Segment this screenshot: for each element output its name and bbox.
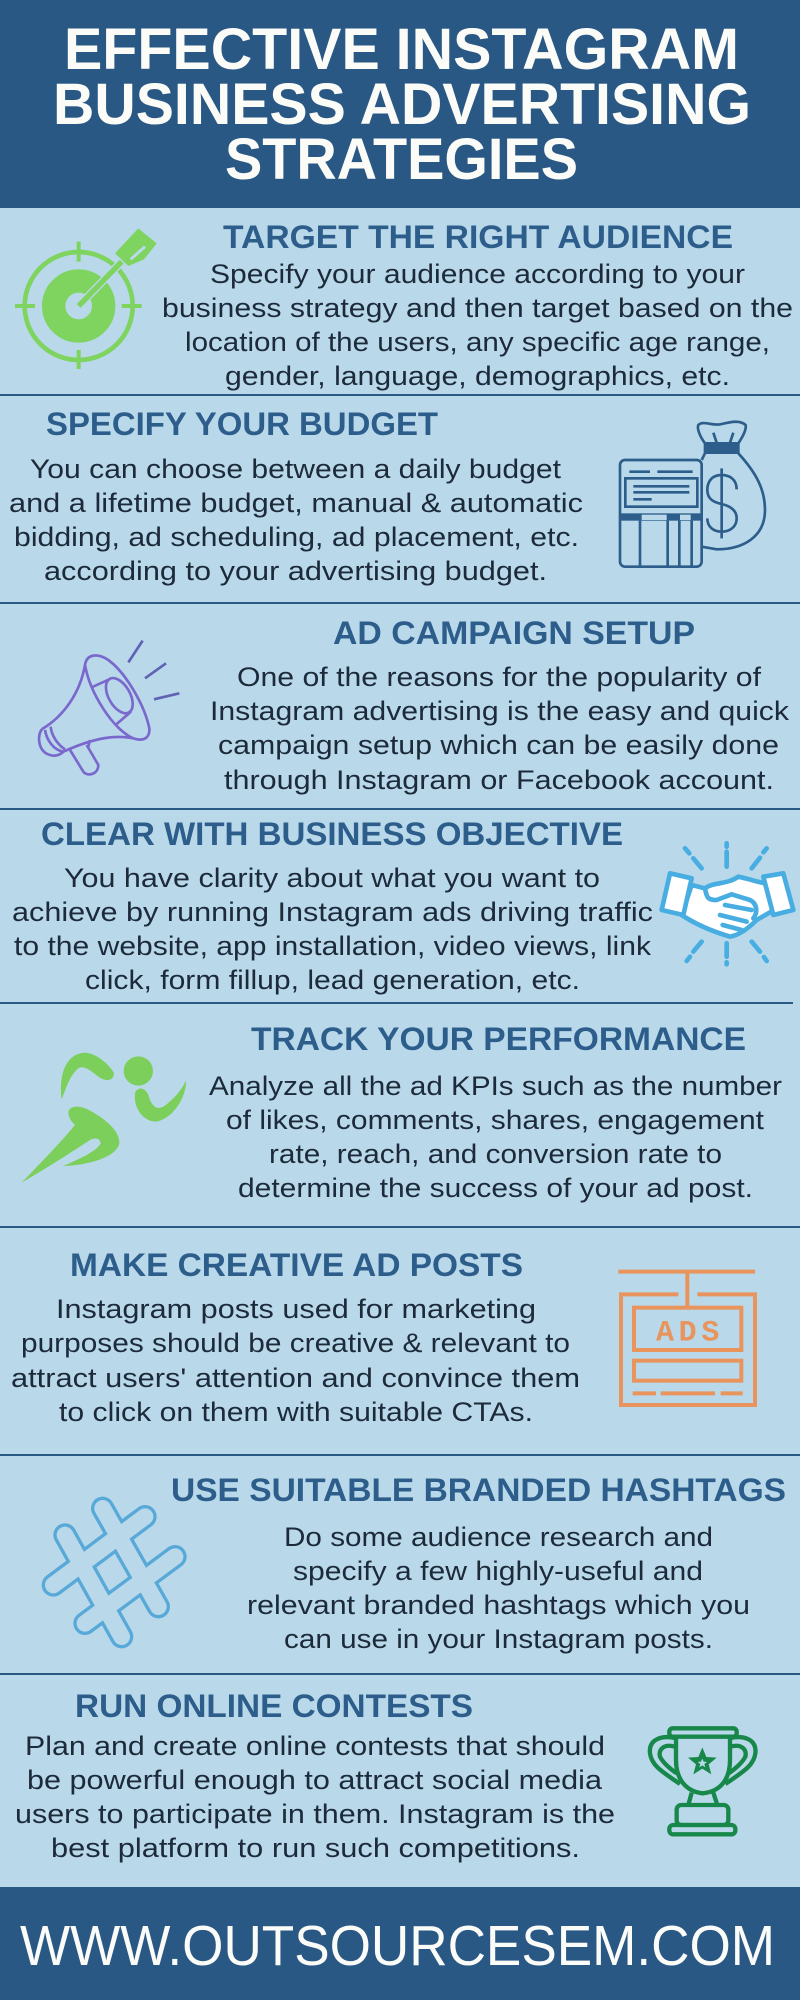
text block: of likes, comments, shares, engagement — [226, 1105, 765, 1135]
header banner with title: EFFECTIVE INSTAGRAM — [64, 17, 739, 82]
text block: rate, reach, and conversion rate to — [269, 1139, 722, 1169]
text block: determine the success of your ad post. — [238, 1173, 753, 1203]
panel: use suitable branded hashtags — [0, 1456, 800, 1673]
text block: purposes should be creative & relevant to — [21, 1328, 570, 1358]
text block: attract users' attention and convince them — [11, 1363, 580, 1393]
icon: ads billboard — [618, 1272, 755, 1405]
panel: ad campaign setup — [0, 604, 800, 808]
heading: TARGET THE RIGHT AUDIENCE — [223, 219, 733, 255]
text block: users to participate in them. Instagram is the — [15, 1799, 615, 1829]
text block: campaign setup which can be easily done — [218, 730, 779, 760]
heading: AD CAMPAIGN SETUP — [333, 615, 695, 651]
text block: Instagram advertising is the easy and quick — [210, 696, 790, 726]
text block: relevant branded hashtags which you — [247, 1590, 750, 1620]
text block: achieve by running Instagram ads driving traffic — [12, 897, 653, 927]
text block: bidding, ad scheduling, ad placement, etc. — [14, 522, 579, 552]
header banner with title: STRATEGIES — [225, 127, 578, 192]
panel: run online contests — [0, 1675, 800, 1887]
text block: according to your advertising budget. — [44, 556, 547, 586]
text block: Instagram posts used for marketing — [56, 1294, 536, 1324]
text block: to click on them with suitable CTAs. — [59, 1397, 533, 1427]
text block: You can choose between a daily budget — [30, 454, 562, 484]
text block: be powerful enough to attract social media — [27, 1765, 603, 1795]
heading: CLEAR WITH BUSINESS OBJECTIVE — [41, 816, 623, 852]
icon: target with arrow — [15, 228, 157, 369]
text block: Analyze all the ad KPIs such as the number — [209, 1071, 782, 1101]
text block: to the website, app installation, video views, link — [14, 931, 652, 961]
panel: make creative ad posts — [0, 1228, 800, 1454]
text block: Plan and create online contests that should — [25, 1731, 605, 1761]
panel: track your performance — [0, 1004, 800, 1226]
footer banner with website — [0, 1887, 800, 2000]
text block: Do some audience research and — [284, 1522, 713, 1552]
heading: TRACK YOUR PERFORMANCE — [251, 1021, 746, 1057]
text block: through Instagram or Facebook account. — [224, 765, 774, 795]
icon: hashtag — [53, 1508, 175, 1637]
text block: gender, language, demographics, etc. — [225, 361, 730, 391]
text block — [162, 259, 793, 391]
text block: Specify your audience according to your — [210, 259, 745, 289]
heading: USE SUITABLE BRANDED HASHTAGS — [171, 1472, 786, 1508]
icon: megaphone — [39, 641, 179, 774]
text block — [247, 1522, 750, 1654]
text block: and a lifetime budget, manual & automatic — [9, 488, 583, 518]
icon: ads billboard: ADS — [656, 1316, 719, 1350]
icon: calculator card and money bag — [620, 422, 765, 567]
icon: trophy — [650, 1728, 755, 1834]
panel: specify your budget — [0, 396, 800, 602]
heading: RUN ONLINE CONTESTS — [75, 1688, 473, 1724]
header banner with title — [0, 0, 800, 208]
panel: target the right audience — [0, 209, 800, 395]
text block — [15, 1731, 615, 1863]
text block: You have clarity about what you want to — [64, 863, 600, 893]
text block: click, form fillup, lead generation, etc. — [85, 965, 580, 995]
text block — [209, 1071, 782, 1203]
panel: clear with business objective — [0, 810, 800, 1002]
text block: One of the reasons for the popularity of — [237, 662, 762, 692]
text block — [9, 454, 583, 586]
text block: business strategy and then target based on the — [162, 293, 793, 323]
heading: MAKE CREATIVE AD POSTS — [70, 1247, 523, 1283]
text block — [11, 1294, 580, 1427]
text block — [12, 863, 653, 995]
icon: handshake — [662, 843, 793, 964]
header banner with title: BUSINESS ADVERTISING — [53, 72, 751, 137]
text block: specify a few highly-useful and — [293, 1556, 703, 1586]
icon: running figure — [22, 1053, 186, 1183]
text block: best platform to run such competitions. — [51, 1833, 580, 1863]
text block: location of the users, any specific age range, — [185, 327, 770, 357]
text block: can use in your Instagram posts. — [284, 1624, 713, 1654]
heading: SPECIFY YOUR BUDGET — [46, 406, 438, 442]
text block — [210, 662, 790, 795]
